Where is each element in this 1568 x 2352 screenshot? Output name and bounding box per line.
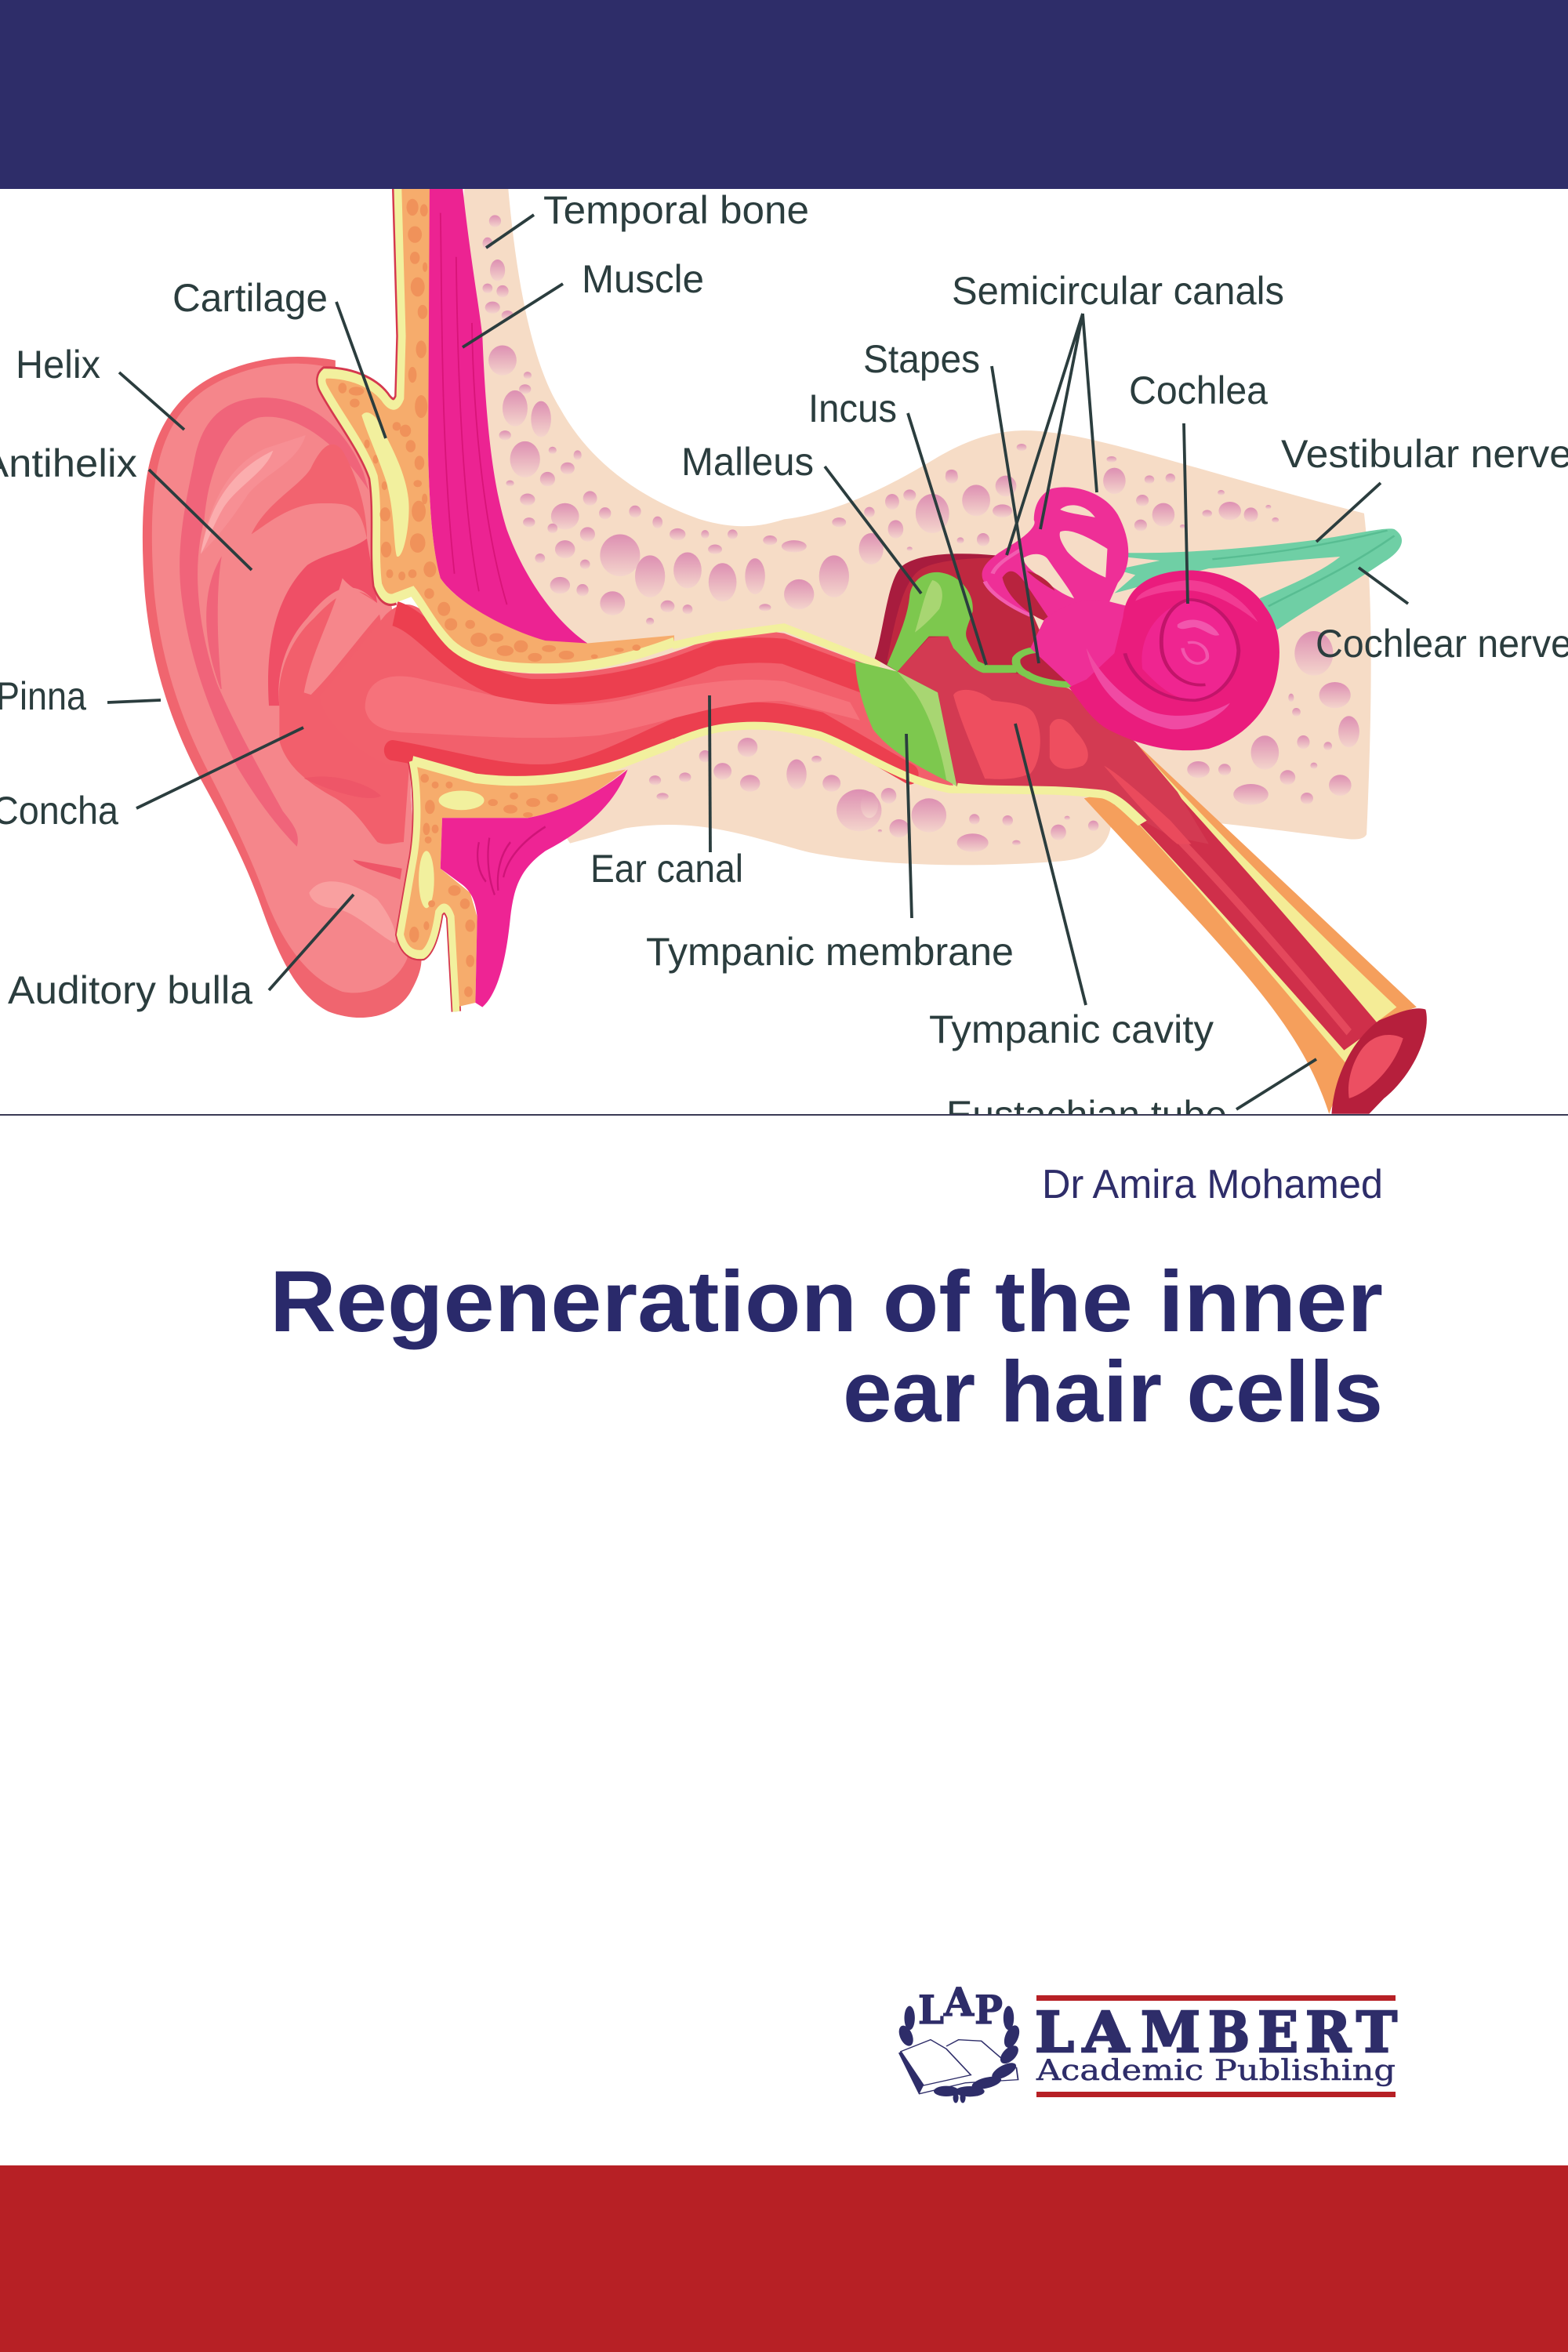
wordmark: LAMBERT: E [1258, 1999, 1298, 2065]
tragus highlight [304, 578, 384, 695]
title: ear hair cells [843, 1344, 1383, 1440]
label: Incus [808, 387, 986, 665]
wordmark: LAMBERT: L [1035, 1999, 1074, 2065]
label: Cartilage [172, 276, 386, 438]
label: Antihelix [0, 441, 252, 570]
title [270, 1254, 1383, 1440]
pinna [143, 357, 421, 1018]
icon: LAP letters [918, 1979, 1003, 2033]
label: Helix: Helix [16, 343, 100, 387]
label: Helix [16, 343, 184, 430]
wordmark: LAMBERT [1035, 1999, 1397, 2065]
image rule [0, 1114, 1568, 1116]
label: Semicircular canals [952, 269, 1284, 555]
skin lining of ear canal, right part [673, 623, 991, 793]
label: Ear canal: Ear canal [590, 847, 743, 891]
label: Auditory bulla [8, 895, 354, 1012]
label: Cartilage: Cartilage [172, 276, 328, 320]
nerves [1114, 528, 1402, 630]
logo: LAMBERT Academic Publishing [896, 1979, 1397, 2103]
cartilage and muscle, upper [321, 187, 674, 668]
wordmark: LAMBERT: B [1208, 1999, 1250, 2065]
label: Tympanic membrane [646, 734, 1014, 974]
icon: LAP letters: A [943, 1979, 975, 2025]
label: Eustachian tube: Eustachian tube [946, 1093, 1227, 1137]
wordmark: LAMBERT: A [1082, 1999, 1130, 2065]
wordmark: LAMBERT: T [1356, 1999, 1397, 2065]
tympanic membrane [855, 661, 957, 786]
label: Eustachian tube [949, 1058, 1317, 1114]
label: Semicircular canals: Semicircular canals [952, 269, 1284, 313]
eustachian tube [1084, 742, 1427, 1114]
label: Cochlea [1129, 368, 1268, 604]
icon: LAP letters: L [918, 1987, 944, 2033]
label: Cochlea: Cochlea [1129, 368, 1268, 412]
bottom red band [0, 2165, 1568, 2352]
label: Muscle: Muscle [582, 257, 704, 301]
label: Incus: Incus [808, 387, 897, 430]
title: Regeneration of the inner [270, 1254, 1383, 1350]
label: Vestibular nerve [1281, 432, 1568, 542]
logo: LAMBERT Academic Publishing: Academic Publishing [1036, 2055, 1396, 2087]
cartilage and muscle, lower [400, 743, 674, 1011]
label: Temporal bone: Temporal bone [543, 188, 809, 232]
label: Malleus [681, 440, 921, 593]
icon: LAP letters: P [975, 1987, 1003, 2033]
icon: laurel and open book [896, 2006, 1022, 2103]
label: Muscle [463, 257, 704, 347]
middle ear and tympanic cavity [875, 554, 1209, 844]
author: Dr Amira Mohamed [1042, 1162, 1383, 1207]
label: Tympanic cavity: Tympanic cavity [929, 1007, 1214, 1051]
anatomical ear illustration [143, 180, 1427, 1114]
label: Malleus: Malleus [681, 440, 814, 484]
label: Stapes [863, 337, 1039, 663]
inner ear: semicircular canals and cochlea [982, 487, 1279, 750]
temporal bone [430, 180, 1371, 865]
label: Pinna [0, 674, 161, 718]
label: Tympanic membrane: Tympanic membrane [646, 930, 1014, 974]
top navy band [0, 0, 1568, 189]
label: Vestibular nerve: Vestibular nerve [1281, 432, 1568, 476]
label: Tympanic cavity [929, 724, 1214, 1051]
wordmark: LAMBERT: M [1141, 1999, 1200, 2065]
label: Auditory bulla: Auditory bulla [8, 968, 252, 1012]
label: Stapes: Stapes [863, 337, 980, 381]
label: Cochlear nerve [1316, 568, 1568, 666]
ossicles: malleus, incus, stapes [887, 572, 1087, 684]
label: Temporal bone [486, 188, 809, 248]
wordmark: LAMBERT: R [1305, 1999, 1352, 2065]
ear canal [320, 604, 954, 787]
label: Concha [0, 728, 303, 833]
